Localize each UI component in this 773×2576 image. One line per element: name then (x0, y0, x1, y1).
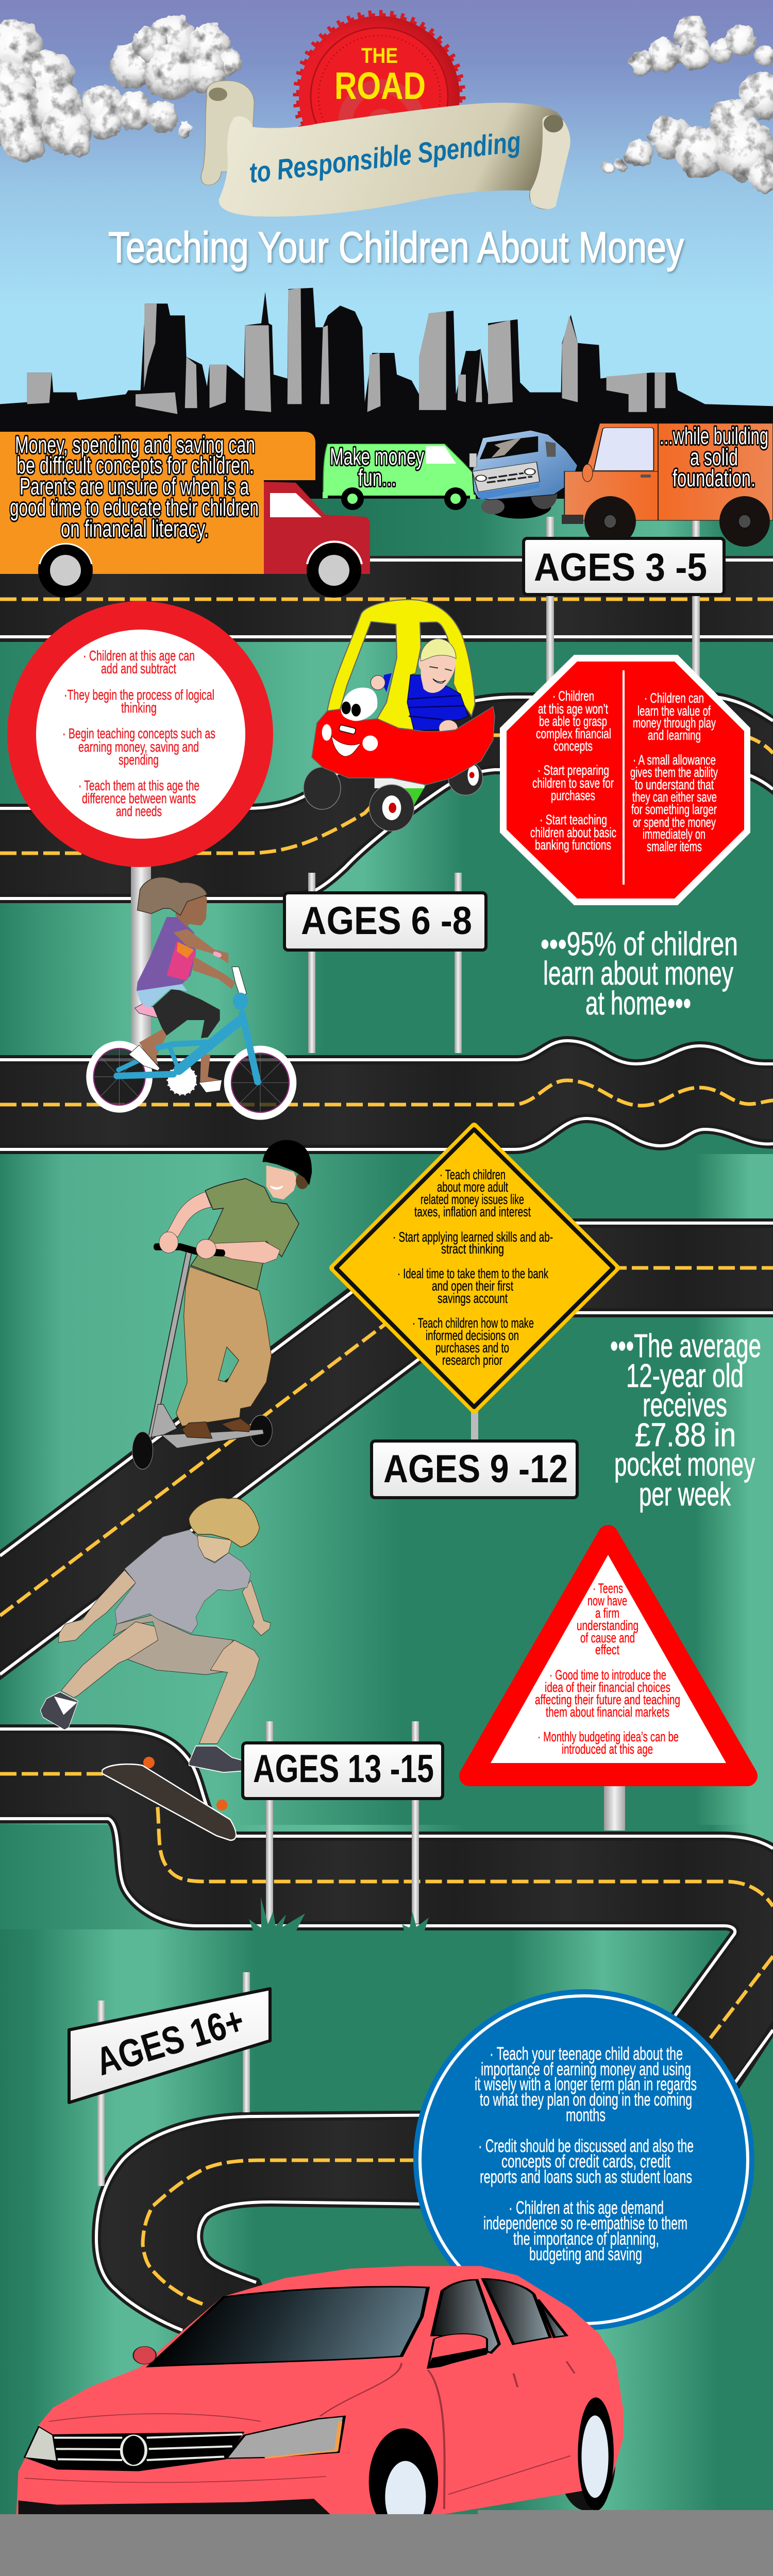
octagon right text: to understand that (635, 777, 714, 792)
blue sign text (475, 2044, 697, 2264)
banner scroll (201, 81, 570, 216)
illustration: boy in toy car (304, 600, 495, 831)
city skyline (0, 288, 773, 520)
bike frame (117, 1013, 258, 1082)
sign poles: ages 13-15 (266, 1721, 419, 1924)
toy car yellow roof (327, 600, 475, 730)
left arm (58, 1570, 136, 1642)
triangle text: a firm (595, 1605, 619, 1621)
badge: red seal (295, 12, 463, 180)
toy car face (322, 724, 378, 756)
blue sign text: the importance of planning, (513, 2229, 659, 2249)
boy head (418, 639, 456, 693)
triangle text: effect (595, 1642, 619, 1657)
circle sign text: · Children at this age can (83, 648, 195, 664)
road sign: ages 3-5: AGES 3 -5 (534, 546, 707, 589)
triangle text: understanding (577, 1618, 638, 1633)
truck cargo box (0, 432, 315, 574)
truck: orange (0, 431, 370, 598)
bike rear wheel (90, 1044, 149, 1109)
pants (176, 1267, 272, 1426)
diamond text: · Teach children how to make (412, 1315, 534, 1331)
hands (159, 1232, 216, 1259)
illustration: girl on bike (90, 877, 293, 1116)
octagon left text (530, 688, 616, 853)
girl arms (174, 929, 236, 989)
girl leggings (153, 988, 220, 1038)
hair (189, 1498, 259, 1547)
triangle text: introduced at this age (562, 1741, 653, 1757)
girl hair (138, 877, 207, 916)
diamond text: about more adult (437, 1179, 508, 1195)
green ground (0, 499, 773, 2517)
octagon right text: or spend the money (633, 815, 716, 830)
triangle shape (469, 1535, 747, 1776)
truck text: Parents are unsure of when is a (20, 473, 249, 500)
road sign: ages 13-15 (243, 1743, 443, 1799)
road 3 wavy (0, 1041, 773, 1149)
red ring (7, 601, 273, 867)
scooter fork (151, 1404, 177, 1437)
diamond text: stract thinking (441, 1241, 504, 1257)
octagon left text: banking functions (535, 837, 611, 853)
triangle sign pole (604, 1785, 625, 1831)
octagon left text: · Children (552, 688, 594, 704)
diamond warning sign (333, 1126, 616, 1410)
right curl opening (544, 115, 563, 132)
helmet (262, 1140, 312, 1185)
shoes (182, 1418, 251, 1438)
circle sign text: · Begin teaching concepts such as (62, 725, 215, 741)
octagon left text: · Start teaching (540, 812, 607, 827)
blue circle sign (413, 1989, 754, 2330)
toy car front wheel (369, 785, 414, 831)
van: blue cartoon (469, 430, 578, 519)
head (266, 1165, 297, 1199)
grey footer band (0, 2510, 773, 2524)
cloud right (602, 15, 773, 193)
badge text: road: ROAD (334, 64, 426, 107)
octagon left text: purchases (551, 788, 595, 803)
sign poles: ages 16+ (97, 1972, 250, 2186)
road sign: ages 13-15: AGES 13 -15 (253, 1747, 434, 1791)
diamond text: research prior (442, 1352, 502, 1368)
circle sign text: spending (119, 752, 159, 768)
shirt (115, 1530, 251, 1633)
blue sign text: budgeting and saving (529, 2244, 642, 2264)
diamond text: taxes, inflation and interest (414, 1204, 531, 1219)
statistic: pocket money: £7.88 in (635, 1416, 736, 1453)
triangle text: now have (587, 1593, 627, 1608)
lower intake (19, 2499, 330, 2514)
octagon right text: money through play (633, 715, 716, 731)
small mirror (133, 2346, 156, 2364)
bike fork top and handlebar (232, 967, 246, 998)
right arm (211, 1241, 280, 1263)
octagon right text: for something larger (631, 802, 717, 817)
triangle text (535, 1581, 680, 1757)
octagon right text: and learning (648, 727, 701, 743)
right arm (242, 1580, 271, 1636)
octagon right text (630, 690, 718, 854)
side windows (432, 2279, 566, 2353)
scooter wheels (132, 1432, 153, 1469)
boy shirt (407, 675, 468, 731)
sign poles: ages 6-8 (308, 873, 462, 1053)
triangle text: idea of their financial choices (545, 1680, 670, 1695)
right scroll curl (530, 115, 570, 209)
truck text (10, 431, 259, 542)
door mirror (428, 2334, 487, 2368)
octagon right text: learn the value of (637, 703, 711, 719)
diamond shape (333, 1126, 616, 1410)
octagon right text: immediately on (643, 826, 705, 842)
right headlight (226, 2416, 344, 2459)
diamond text: and open their first (432, 1278, 513, 1294)
scooter handle (156, 1247, 223, 1253)
circle sign text: ·They begin the process of logical (64, 687, 214, 703)
octagon left text: children about basic (530, 825, 616, 840)
skateboard wheels (143, 1757, 155, 1768)
truck text: on financial literacy. (61, 515, 209, 542)
octagon right text: smaller items (647, 839, 702, 854)
bike front wheel (228, 1049, 293, 1116)
shirt graphic (166, 941, 196, 980)
toy car wheels (304, 761, 483, 819)
circle sign text: difference between wants (82, 790, 196, 806)
grille (24, 2432, 244, 2471)
diamond text: related money issues like (421, 1192, 524, 1207)
left scroll curl (201, 81, 254, 185)
diamond text: · Ideal time to take them to the bank (397, 1266, 548, 1281)
blue disc (413, 1989, 754, 2330)
road sign: ages 9-12 (372, 1441, 577, 1498)
diamond text: savings account (438, 1291, 508, 1306)
toy car red body (312, 707, 495, 785)
octagon left text: complex financial (536, 726, 611, 741)
circle sign text: add and subtract (101, 660, 176, 676)
right shoe (189, 1746, 254, 1772)
circle sign text (62, 648, 215, 819)
circle sign text: earning money, saving and (78, 739, 199, 755)
illustration: skateboarder (40, 1498, 271, 1840)
blue sign text: months (566, 2105, 606, 2125)
octagon right text: they can either save (632, 789, 717, 805)
road 6 hairpin (96, 2115, 464, 2349)
octagon left text: concepts (553, 738, 593, 754)
body crease lines (24, 2361, 575, 2509)
van text: Make money (330, 443, 424, 470)
road sign: ages 16+: AGES 16+ (91, 1998, 249, 2084)
triangle text: · Good time to introduce the (549, 1667, 666, 1683)
shirt (191, 1179, 299, 1290)
octagon right text: · A small allowance (633, 752, 716, 768)
statistic: pocket money: per week (639, 1476, 731, 1513)
road sign: ages 6-8: AGES 6 -8 (301, 899, 472, 943)
grass tufts (249, 1897, 429, 1934)
sandal and pedal (129, 1045, 160, 1071)
circle sign (7, 601, 273, 867)
circle sign text: thinking (121, 700, 157, 716)
triangle text: them about financial markets (546, 1704, 669, 1720)
right leg (199, 1640, 259, 1743)
triangle text: of cause and (580, 1630, 635, 1646)
left arm (166, 1192, 211, 1237)
left leg (61, 1622, 158, 1698)
octagon right text: gives them the ability (630, 765, 718, 780)
sign poles: ages 3-5 (546, 517, 700, 682)
road sign: ages 9-12: AGES 9 -12 (383, 1447, 568, 1491)
girl rear lower leg (139, 1029, 166, 1065)
statistic: pocket money: receives (643, 1386, 727, 1423)
girl shirt (137, 917, 196, 991)
toy car eyes (341, 688, 377, 721)
circle sign text: · Teach them at this age the (78, 777, 199, 793)
blue sign text: concepts of credit cards, credit (501, 2151, 670, 2172)
truck text: be difficult concepts for children. (16, 452, 254, 479)
triangle text: · Monthly budgeting idea’s can be (537, 1729, 679, 1744)
truck wheels (38, 541, 362, 598)
banner text: to Responsible Spending (247, 125, 523, 189)
sky background (0, 0, 773, 309)
octagon left text: children to save for (532, 775, 614, 791)
diamond text: · Teach children (440, 1167, 506, 1182)
blue sign text: · Children at this age demand (509, 2198, 664, 2218)
statistic: pocket money (610, 1327, 761, 1513)
circle sign text: and needs (116, 803, 162, 819)
cloud left (0, 15, 242, 163)
diamond sign pole (471, 1409, 478, 1441)
diamond text: · Start applying learned skills and ab- (393, 1229, 553, 1245)
truck text: Money, spending and saving can (15, 431, 255, 458)
road 5 winding (0, 1729, 773, 2107)
truck: right orange: a solid (690, 444, 738, 470)
statistic: 95 percent: at home••• (585, 985, 691, 1022)
bike seat (135, 1004, 175, 1018)
octagon left text: be able to grasp (539, 714, 607, 729)
girl skirt (137, 984, 187, 1008)
girl front lower leg (200, 1055, 220, 1082)
illustration: boy on scooter (132, 1140, 312, 1469)
windshield (149, 2287, 428, 2366)
rear tyre (558, 2415, 615, 2511)
diamond text (393, 1167, 553, 1368)
truck text: good time to educate their children (10, 494, 259, 521)
octagon left text: · Start preparing (537, 762, 609, 778)
diamond text: informed decisions on (426, 1328, 519, 1343)
girl face (175, 894, 207, 927)
van: green: fun... (358, 464, 396, 491)
blue sign text: · Teach your teenage child about the (490, 2044, 683, 2064)
left headlight (24, 2427, 57, 2461)
front wheel (369, 2428, 438, 2535)
pole: circle sign (131, 866, 151, 1054)
statistic: 95 percent (541, 925, 738, 1022)
octagon shape (500, 655, 750, 905)
truck window (270, 493, 322, 517)
road sign: ages 6-8 (284, 893, 486, 950)
left curl opening (209, 88, 227, 101)
truck cab (264, 482, 370, 574)
octagon left text: at this age won’t (538, 701, 608, 717)
left shoe (40, 1692, 78, 1730)
scooter stem (151, 1252, 189, 1437)
triangle warning sign (469, 1535, 747, 1776)
car body (16, 2266, 624, 2514)
octagon right text: · Children can (644, 690, 704, 706)
illustration: red car (16, 2266, 624, 2535)
road 4 diagonal (0, 1223, 773, 1677)
van: green (323, 443, 476, 510)
triangle text: · Teens (593, 1581, 623, 1596)
bike chainring (166, 1065, 197, 1096)
shorts (113, 1615, 233, 1675)
skateboard (102, 1764, 236, 1840)
badge text: the: THE (361, 43, 398, 67)
bike grip (212, 951, 222, 958)
diamond text: purchases and to (435, 1340, 509, 1355)
boy hands (371, 675, 458, 736)
triangle text: affecting their future and teaching (535, 1692, 680, 1707)
scooter deck (161, 1430, 264, 1448)
road 1 (0, 556, 773, 642)
road 2 curving up (0, 697, 773, 899)
banner ribbon (219, 103, 569, 216)
head (197, 1535, 232, 1562)
octagon sign (500, 655, 750, 905)
truck: right orange (562, 422, 773, 547)
rear wheel hub (578, 2397, 614, 2511)
